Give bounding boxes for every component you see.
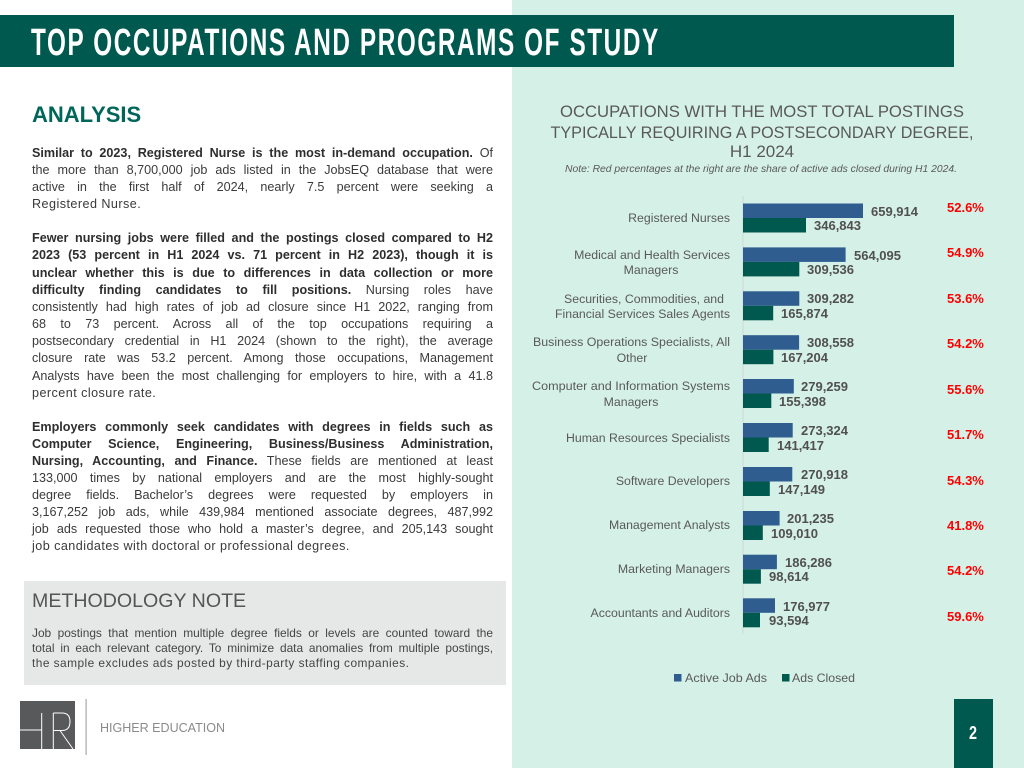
row: Medical and Health Services Managers: Managers [624,263,678,277]
chart: occupations bar chart [532,102,984,685]
text block: analysis paragraph 1: active in the first half of 2024, nearly 7.5 percent were seeking a [32,180,493,194]
text block: analysis paragraph 3: Nursing, Accounting, and Finance. These fields are mentioned at least [32,454,493,468]
text block: analysis paragraph 2 [32,231,493,400]
row: Registered Nurses: 52.6% [947,200,984,215]
text block: analysis paragraph 3: 3,167,252 job ads, while 439,984 mentioned associate degrees, 487,992 [32,505,493,519]
text block: analysis paragraph 1 [32,146,493,211]
row: Business Operations Specialists, All Other: 167,204 [781,350,829,365]
chart note: Note: Red percentages at the right are the share of active ads closed during H1 2024. [565,163,957,175]
row: Human Resources Specialists: 141,417 [777,438,824,453]
row: Medical and Health Services Managers: 54.9% [947,245,984,260]
row: Securities, Commodities, and Financial Services Sales Agents: 309,282 [807,291,854,306]
row: Human Resources Specialists: 273,324 [801,423,849,438]
row: Marketing Managers: Marketing Managers [618,562,730,576]
row: Accountants and Auditors: Accountants and Auditors [591,606,730,620]
row: Medical and Health Services Managers: 309,536 [807,262,854,277]
row: Accountants and Auditors: 176,977 [783,599,830,614]
logo: HR Higher Education [20,699,225,755]
chart title: TYPICALLY REQUIRING A POSTSECONDARY DEGREE, [550,123,974,142]
row: Management Analysts: 109,010 [771,526,818,541]
text block: methodology note [32,626,493,670]
row: Medical and Health Services Managers: 564,095 [854,248,901,263]
text block: methodology note: the sample excludes ads posted by third-party staffing companies. [32,656,409,670]
text block: analysis paragraph 3: job candidates with doctoral or professional degrees. [32,539,350,553]
page number [954,699,993,768]
text block: analysis paragraph 2: difficulty finding candidates to fill positions. Nursing roles have [32,282,493,296]
text block: analysis paragraph 2: Analysts have been the most challenging for employers to hire, with a 41.8 [32,369,493,383]
row: Accountants and Auditors [591,598,984,628]
text block: analysis paragraph 3: Employers commonly seek candidates with degrees in fields such as [32,420,493,434]
row: Business Operations Specialists, All Other: Business Operations Specialists, All [533,335,730,349]
row: Computer and Information Systems Managers: Managers [604,395,658,409]
row: Securities, Commodities, and Financial Services Sales Agents: Securities, Commodities, and [564,292,724,306]
row: Registered Nurses: 346,843 [814,218,861,233]
row: Accountants and Auditors: 93,594 [769,613,810,628]
row: Software Developers: Software Developers [616,474,730,488]
text block: analysis paragraph 3 [32,420,493,553]
row: Business Operations Specialists, All Other [533,335,984,365]
heading: analysis: ANALYSIS [32,102,141,127]
panel: methodology note [24,581,506,685]
title banner: TOP OCCUPATIONS AND PROGRAMS OF STUDY [31,20,658,63]
row: Securities, Commodities, and Financial Services Sales Agents: 53.6% [947,291,984,306]
text block: analysis paragraph 3: job ads requested those who hold a master’s degree, and 205,143 sought [32,522,493,536]
row: Human Resources Specialists [566,423,984,453]
row: Medical and Health Services Managers [574,245,984,277]
row: Marketing Managers: 186,286 [785,555,832,570]
text block: analysis paragraph 2: 2023 (53 percent in H1 2024 vs. 71 percent in H2 2023), though it is [32,248,493,262]
text block: analysis paragraph 2: unclear whether this is due to differences in data collection or more [32,266,493,280]
text block: analysis paragraph 3: 133,000 times by national employers and are the most highly-sought [32,471,493,485]
row: Computer and Information Systems Managers: 55.6% [947,382,984,397]
text block: methodology note: total in each relevant category. To minimize data anomalies from multiple postings, [32,641,493,655]
row: Management Analysts: 201,235 [787,511,834,526]
row: Marketing Managers [618,555,984,584]
text block: analysis paragraph 3: degree fields. Bachelor’s degrees were requested by employers in [32,488,493,502]
row: Marketing Managers: 54.2% [947,563,984,578]
row: Computer and Information Systems Managers: 155,398 [779,394,826,409]
row: Software Developers: 54.3% [947,473,984,488]
text block: analysis paragraph 1: Registered Nurse. [32,197,141,211]
row: Human Resources Specialists: Human Resources Specialists [566,431,730,445]
text block: analysis paragraph 2: percent closure rate. [32,386,156,400]
row: Business Operations Specialists, All Other: 308,558 [807,335,854,350]
legend: Active Job Ads [685,671,767,685]
row: Software Developers: 147,149 [778,482,825,497]
text block: analysis paragraph 2: closure rate was 53.2 percent. Among those occupations, Management [32,351,493,365]
row: Software Developers [616,467,984,497]
row: Business Operations Specialists, All Other: 54.2% [947,336,984,351]
row: Securities, Commodities, and Financial Services Sales Agents: Financial Services Sales Agents [555,307,730,321]
chart title: OCCUPATIONS WITH THE MOST TOTAL POSTINGS [560,102,964,121]
row: Registered Nurses [628,200,984,233]
row: Management Analysts: 41.8% [947,518,984,533]
chart title: H1 2024 [730,142,794,161]
text block: analysis paragraph 3: Computer Science, Engineering, Business/Business Administration, [32,437,493,451]
chart title [550,102,974,161]
title banner [0,15,954,67]
row: Business Operations Specialists, All Other: Other [617,351,647,365]
text block: analysis paragraph 1: Similar to 2023, Registered Nurse is the most in-demand occupation. Of [32,146,493,160]
text block: analysis paragraph 2: 68 to 73 percent. Across all of the top occupations requiring a [32,317,493,331]
text block: analysis paragraph 2: consistently had high rates of job ad closure since H1 2022, ranging from [32,300,493,314]
row: Management Analysts: Management Analysts [609,518,730,532]
row: Medical and Health Services Managers: Medical and Health Services [574,248,730,262]
row: Computer and Information Systems Managers [532,379,984,409]
legend: Ads Closed [792,671,855,685]
logo: HR Higher Education: HIGHER EDUCATION [100,720,225,735]
row: Management Analysts [609,511,984,541]
row: Registered Nurses: Registered Nurses [628,211,730,225]
text block: analysis paragraph 2: postsecondary credential in H1 2024 (shown to the right), the average [32,334,493,348]
row: Accountants and Auditors: 59.6% [947,609,984,624]
row: Marketing Managers: 98,614 [769,569,810,584]
text block: analysis paragraph 1: the more than 8,700,000 job ads listed in the JobsEQ database that were [32,163,493,177]
row: Human Resources Specialists: 51.7% [947,427,984,442]
row: Securities, Commodities, and Financial Services Sales Agents [555,291,984,321]
row: Registered Nurses: 659,914 [871,204,919,219]
page number: 2 [969,723,977,743]
row: Computer and Information Systems Managers: 279,259 [801,379,848,394]
heading: methodology note: METHODOLOGY NOTE [32,590,246,612]
legend [674,671,855,685]
panel: right background [512,0,1024,768]
row: Computer and Information Systems Managers: Computer and Information Systems [532,379,730,393]
text block: analysis paragraph 2: Fewer nursing jobs were filled and the postings closed compared to H2 [32,231,493,245]
row: Securities, Commodities, and Financial Services Sales Agents: 165,874 [781,306,829,321]
text block: methodology note: Job postings that mention multiple degree fields or levels are counted toward the [32,626,493,640]
row: Software Developers: 270,918 [801,467,848,482]
